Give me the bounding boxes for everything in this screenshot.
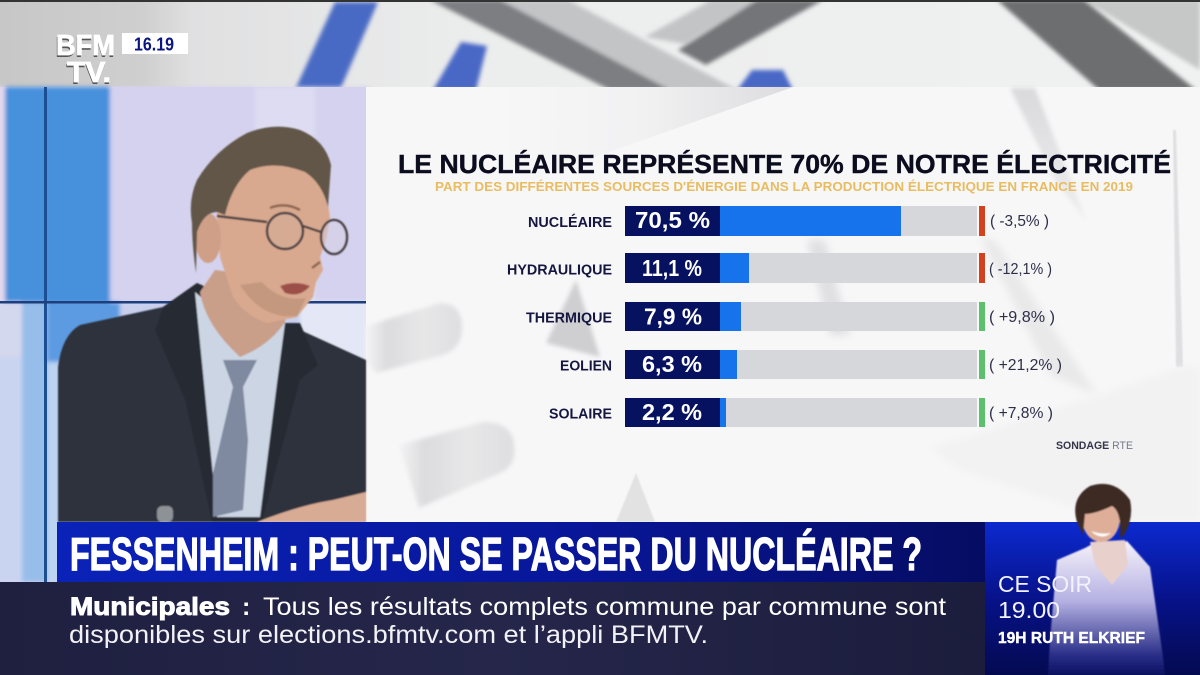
- ear: [195, 213, 221, 263]
- presenter: [58, 127, 366, 522]
- row: thermique: 7,9 %: [644, 304, 702, 330]
- ticker bar: [0, 582, 985, 675]
- promo time: 19.00: [998, 597, 1060, 623]
- row: hydraulique: 11,1 %: [642, 255, 702, 281]
- neck: [200, 270, 290, 357]
- row: eolien: 6,3 %: [642, 351, 702, 377]
- glasses: [217, 213, 347, 254]
- title: LE NUCLÉAIRE REPRÉSENTE 70% DE NOTRE ÉLECTRICITÉ: [398, 149, 1171, 179]
- row: solaire: ( +7,8% ): [989, 405, 1053, 422]
- logo shadow: BFM: [55, 32, 115, 64]
- clock: [122, 33, 188, 54]
- logo TV: TV.: [67, 57, 111, 89]
- ticker colon: :: [242, 593, 250, 621]
- eyebrow and nose shadow: [270, 205, 320, 268]
- headline bar: [57, 522, 985, 582]
- shirt: [195, 292, 285, 517]
- ticker text line 1: Tous les résultats complets commune par commune sont: [263, 593, 946, 621]
- row: thermique: THERMIQUE: [526, 310, 612, 326]
- row: nucléaire: NUCLÉAIRE: [528, 214, 612, 231]
- microphone: [157, 506, 173, 522]
- channel logo: [55, 30, 115, 91]
- watermark: pill shape bottom: [399, 422, 514, 508]
- row: solaire: 2,2 %: [642, 399, 702, 425]
- row: solaire: [549, 398, 1053, 427]
- mouth: [280, 283, 310, 294]
- ticker text line 2: disponibles sur elections.bfmtv.com et l’appli BFMTV.: [69, 621, 708, 649]
- row: nucléaire: 70,5 %: [635, 207, 710, 233]
- bar chart: [507, 206, 1062, 427]
- row: nucléaire: [528, 206, 1049, 236]
- row: eolien: ( +21,2% ): [989, 357, 1062, 374]
- promo show: 19H RUTH ELKRIEF: [998, 630, 1145, 647]
- jacket: [58, 283, 366, 522]
- stubble: [240, 282, 306, 316]
- ticker keyword: Municipales: [70, 593, 230, 621]
- logo TV shadow: TV.: [66, 59, 111, 91]
- subtitle: PART DES DIFFÉRENTES SOURCES D'ÉNERGIE DANS LA PRODUCTION ÉLECTRIQUE EN FRANCE EN 2019: [435, 179, 1133, 194]
- hair: [191, 127, 331, 273]
- row: solaire: SOLAIRE: [549, 406, 612, 422]
- promo label: CE SOIR: [998, 571, 1092, 597]
- watermark: pill shape top: [366, 303, 462, 373]
- panel: chart background: [366, 87, 1200, 522]
- presenter portrait: [1048, 484, 1165, 675]
- studio video backdrop: [0, 87, 370, 582]
- top studio background: [0, 0, 1200, 90]
- row: thermique: [526, 302, 1055, 331]
- hand: [257, 492, 366, 522]
- row: hydraulique: HYDRAULIQUE: [507, 262, 612, 278]
- tie: [213, 360, 257, 517]
- row: hydraulique: ( -12,1% ): [989, 261, 1052, 278]
- row: eolien: EOLIEN: [560, 358, 612, 374]
- source note: SONDAGE RTE: [1056, 440, 1133, 452]
- clock: 16.19: [134, 34, 174, 54]
- row: nucléaire: ( -3,5% ): [990, 213, 1049, 230]
- row: eolien: [560, 350, 1062, 379]
- logo BFM: BFM: [56, 30, 115, 62]
- face: [216, 155, 330, 323]
- promo box: ce soir: [985, 484, 1200, 675]
- row: thermique: ( +9,8% ): [989, 309, 1055, 326]
- row: hydraulique: [507, 253, 1052, 283]
